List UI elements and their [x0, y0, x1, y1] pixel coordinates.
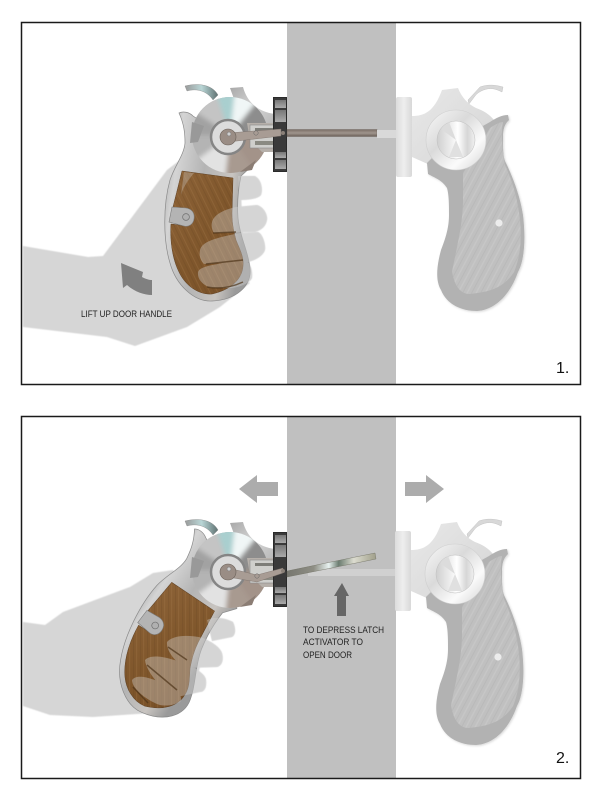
panel 1: lift up door handle: [22, 22, 580, 384]
label: lift up door handle: LIFT UP DOOR HANDLE: [81, 309, 172, 319]
exterior handle, greyed: [395, 519, 523, 745]
step number 1: 1.: [556, 360, 569, 377]
panel 1 frame: [22, 22, 580, 384]
exterior handle, greyed: [396, 85, 524, 311]
handle grip with wood panel: [165, 112, 252, 301]
step number 2: 2.: [556, 750, 569, 767]
label: depress latch activator: TO DEPRESS LATCH: [303, 625, 384, 635]
label: depress latch activator: ACTIVATOR TO: [303, 637, 363, 647]
hand holding handle: [23, 570, 235, 717]
fingers over grip: [181, 172, 267, 288]
arrow: door pushed left: [239, 475, 278, 503]
curved arrow: lift up: [121, 263, 152, 295]
mounting blocks: [274, 532, 286, 606]
panel 2 frame: [22, 416, 580, 778]
latch lever: [220, 129, 377, 145]
door cross-section: [287, 417, 396, 778]
label: depress latch activator: OPEN DOOR: [303, 650, 352, 660]
door cross-section: [287, 23, 396, 384]
raised latch lever: [220, 553, 376, 582]
latch slot highlight: [377, 130, 396, 138]
mounting blocks: [274, 98, 286, 172]
fingers over grip: [132, 618, 235, 706]
arrow: door pushed right: [405, 475, 444, 503]
handle mechanism hub: [185, 520, 287, 615]
hand holding handle: [23, 160, 267, 346]
panel 2: depress latch activator: [22, 416, 580, 778]
handle grip rotated with wood panel: [99, 522, 261, 730]
latch channel highlight: [308, 569, 396, 576]
arrow: up to latch: [334, 583, 349, 616]
handle mechanism hub: [185, 85, 287, 180]
